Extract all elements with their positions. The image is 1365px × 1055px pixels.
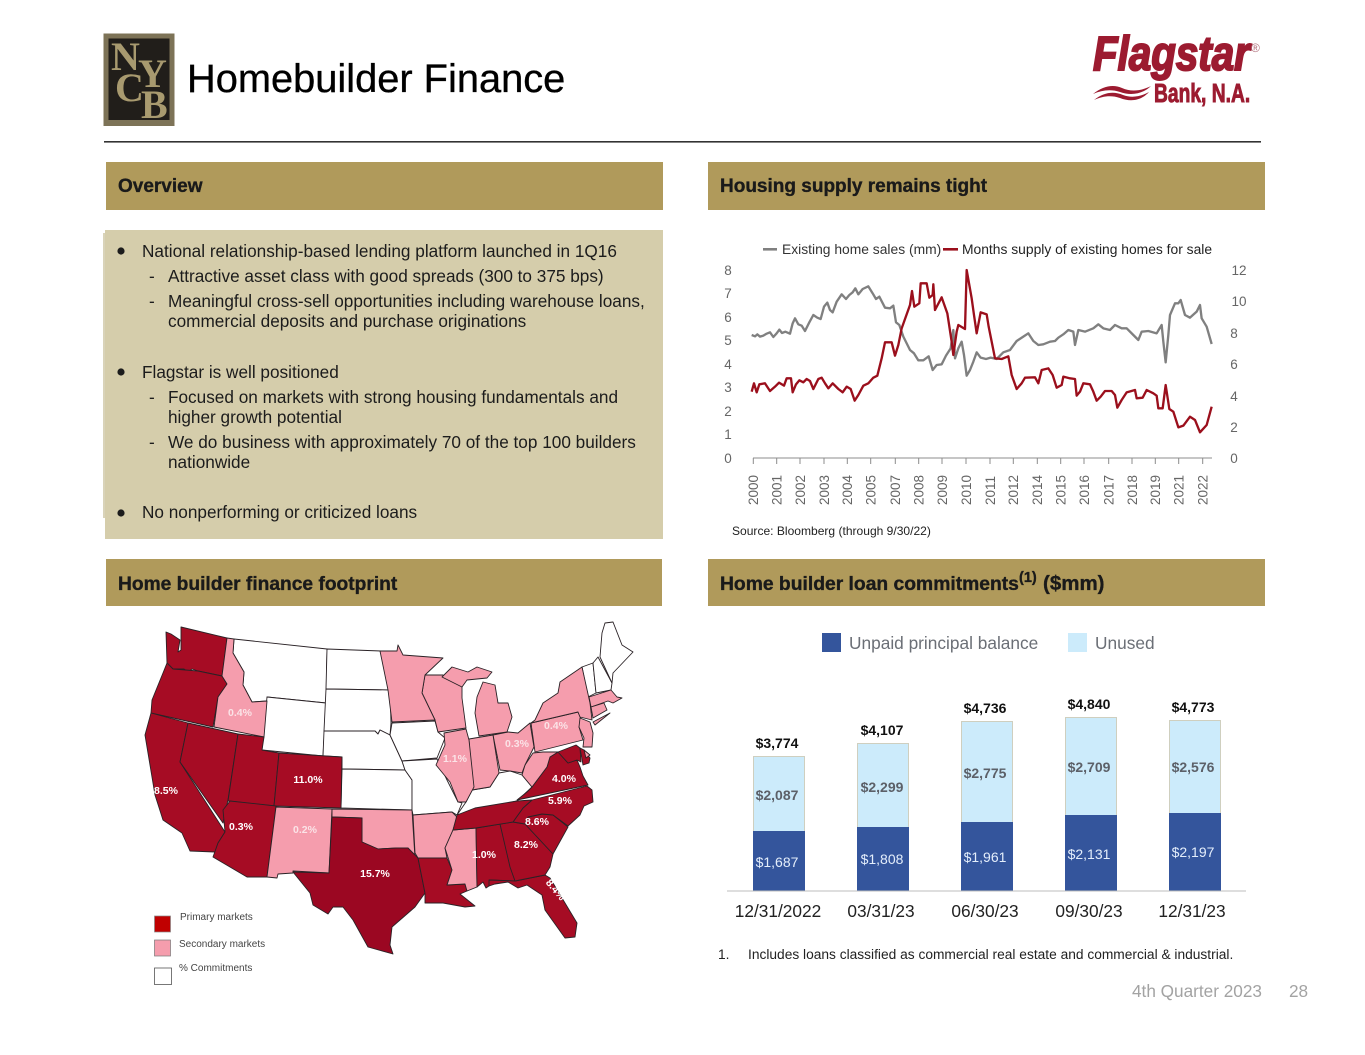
x axis year labels: 2019 bbox=[1148, 475, 1163, 505]
bar: 09/30/23: $2,131 bbox=[1068, 846, 1111, 862]
bar: 12/31/2022: $1,687 bbox=[756, 854, 799, 870]
x axis year labels: 2011 bbox=[983, 476, 998, 505]
left axis labels: 4 bbox=[724, 357, 732, 372]
bar: 06/30/23: $1,961 bbox=[964, 849, 1007, 865]
panel: overview text bbox=[103, 230, 663, 539]
x axis year labels: 2000 bbox=[746, 475, 761, 505]
map value labels: 8.4% bbox=[543, 877, 568, 904]
left axis labels: 5 bbox=[724, 333, 732, 348]
panel: overview text: Meaningful cross-sell opportunities including warehouse loans, bbox=[168, 291, 645, 311]
x axis year labels: 2015 bbox=[1054, 475, 1068, 505]
x axis year labels: 2002 bbox=[793, 475, 808, 505]
bar: 12/31/23: 12/31/23 bbox=[1158, 901, 1226, 921]
map value labels: 0.3% bbox=[229, 821, 254, 833]
panel: overview text: commercial deposits and purchase originations bbox=[168, 311, 526, 331]
series: existing home sales bbox=[752, 286, 1212, 376]
right axis labels: 10 bbox=[1231, 294, 1247, 309]
panel: overview text: - bbox=[149, 432, 155, 452]
x axis year labels: 2010 bbox=[959, 475, 974, 505]
left axis labels: 0 bbox=[724, 451, 732, 466]
line chart: housing supply bbox=[724, 241, 1247, 505]
x axis year labels: 2007 bbox=[888, 475, 903, 505]
map value labels: 11.0% bbox=[293, 774, 323, 786]
map value labels: 0.3% bbox=[505, 738, 530, 750]
heading: Housing supply remains tight bbox=[708, 162, 1265, 210]
right axis labels: 4 bbox=[1230, 389, 1238, 404]
map legend: Primary markets bbox=[180, 912, 253, 923]
logo: NYCB bbox=[104, 34, 174, 127]
map value labels: 8.6% bbox=[525, 816, 550, 828]
bar: 12/31/2022: 12/31/2022 bbox=[735, 901, 821, 921]
bar: 03/31/23: $1,808 bbox=[861, 851, 904, 867]
chart legend bbox=[763, 241, 1212, 257]
panel: overview text: higher growth potential bbox=[168, 407, 342, 427]
map value labels: 5.9% bbox=[548, 795, 573, 807]
left axis labels bbox=[724, 263, 732, 466]
right axis labels: 8 bbox=[1230, 326, 1238, 341]
bar: 06/30/23: 06/30/23 bbox=[951, 901, 1019, 921]
panel: overview text: - bbox=[149, 266, 155, 286]
bar: 03/31/23: $2,299 bbox=[861, 779, 904, 795]
bar: 12/31/2022: $2,087 bbox=[756, 787, 799, 803]
bar: 03/31/23 bbox=[847, 722, 915, 921]
bar: 09/30/23 bbox=[1055, 696, 1123, 921]
logo: Flagstar Bank: Bank, N.A. bbox=[1154, 78, 1250, 108]
map legend: Secondary markets bbox=[179, 939, 265, 950]
map: US footprint bbox=[145, 622, 633, 954]
bar: 12/31/23: $2,197 bbox=[1172, 844, 1215, 860]
right axis labels: 6 bbox=[1230, 357, 1238, 372]
panel: overview text: - bbox=[149, 291, 155, 311]
heading: Home builder finance footprint bbox=[106, 559, 662, 606]
bar chart legend: Unused bbox=[1095, 633, 1155, 653]
right axis labels: 12 bbox=[1231, 263, 1247, 278]
panel: overview text: We do business with approximately 70 of the top 100 builders bbox=[168, 432, 636, 452]
panel: overview text: Attractive asset class with good spreads (300 to 375 bps) bbox=[168, 266, 604, 286]
x axis year labels: 2008 bbox=[912, 475, 926, 505]
heading: Home builder loan commitments: ($mm) bbox=[1043, 572, 1105, 595]
heading: Home builder finance footprint: Home builder finance footprint bbox=[118, 574, 398, 595]
x axis year labels bbox=[746, 474, 1210, 505]
bar: 03/31/23: 03/31/23 bbox=[847, 901, 915, 921]
x axis year labels: 2018 bbox=[1125, 475, 1140, 505]
right axis labels bbox=[1230, 263, 1247, 466]
panel: overview text: No nonperforming or criticized loans bbox=[142, 502, 417, 522]
bar: 12/31/2022: $3,774 bbox=[756, 735, 799, 751]
heading: Home builder loan commitments: Home builder loan commitments bbox=[720, 574, 1019, 595]
heading: Home builder loan commitments bbox=[708, 559, 1265, 606]
map value labels: 15.7% bbox=[360, 868, 391, 880]
source note: Source: Bloomberg (through 9/30/22) bbox=[732, 524, 931, 538]
x axis year labels: 2005 bbox=[864, 475, 878, 505]
panel: overview text: Flagstar is well positioned bbox=[142, 362, 339, 382]
bar chart legend: Unpaid principal balance bbox=[849, 633, 1038, 653]
bar: 09/30/23: $4,840 bbox=[1068, 696, 1111, 712]
heading: Overview bbox=[106, 162, 663, 210]
right axis labels: 2 bbox=[1230, 420, 1238, 435]
heading: Overview: Overview bbox=[118, 176, 203, 197]
x axis year labels: 2004 bbox=[840, 474, 855, 505]
logo: NYCB: B bbox=[141, 82, 168, 127]
map legend: % Commitments bbox=[179, 963, 252, 974]
bar: 12/31/23 bbox=[1158, 699, 1226, 921]
logo: NYCB: Y bbox=[138, 51, 167, 96]
footer: quarter and page number: 4th Quarter 2023 bbox=[1132, 981, 1262, 1001]
series: months supply bbox=[752, 270, 1212, 432]
x axis year labels: 2014 bbox=[1030, 474, 1045, 505]
panel: overview text: Focused on markets with strong housing fundamentals and bbox=[168, 387, 618, 407]
bar: 06/30/23: $4,736 bbox=[964, 700, 1007, 716]
chart legend: Existing home sales (mm) bbox=[782, 241, 941, 257]
header rule bbox=[104, 141, 1261, 143]
left axis labels: 7 bbox=[724, 286, 732, 301]
x axis year labels: 2022 bbox=[1196, 475, 1210, 505]
map value labels bbox=[154, 707, 577, 904]
bar: 12/31/23: $2,576 bbox=[1172, 759, 1215, 775]
panel: overview text: National relationship-based lending platform launched in 1Q16 bbox=[142, 241, 617, 261]
bar: 03/31/23: $4,107 bbox=[861, 722, 904, 738]
bar chart legend bbox=[822, 633, 1155, 653]
logo: NYCB: C bbox=[115, 65, 144, 110]
panel: overview text: nationwide bbox=[168, 452, 250, 472]
map value labels: 8.2% bbox=[514, 839, 539, 851]
map value labels: 8.5% bbox=[154, 785, 179, 797]
map legend bbox=[154, 912, 265, 984]
bar: 12/31/23: $4,773 bbox=[1172, 699, 1215, 715]
x axis year labels: 2016 bbox=[1077, 475, 1092, 505]
bar: 09/30/23: $2,709 bbox=[1068, 759, 1111, 775]
x axis bbox=[753, 458, 1212, 464]
chart legend: Months supply of existing homes for sale bbox=[962, 241, 1212, 257]
x axis year labels: 2017 bbox=[1102, 475, 1116, 505]
logo: Flagstar Bank: ® bbox=[1251, 41, 1260, 55]
map value labels: 1.1% bbox=[443, 753, 468, 765]
left axis labels: 6 bbox=[724, 310, 732, 325]
x axis year labels: 2003 bbox=[817, 475, 832, 505]
left axis labels: 8 bbox=[724, 263, 732, 278]
bar: 09/30/23: 09/30/23 bbox=[1055, 901, 1123, 921]
panel: overview text: - bbox=[149, 387, 155, 407]
title: Homebuilder Finance bbox=[187, 57, 565, 101]
footnote: 1. bbox=[718, 947, 729, 962]
map value labels: 1.0% bbox=[472, 849, 497, 861]
logo: Flagstar Bank bbox=[1093, 28, 1260, 108]
x axis year labels: 2009 bbox=[935, 475, 950, 505]
bar: 12/31/2022 bbox=[735, 735, 821, 921]
bar: 06/30/23 bbox=[951, 700, 1019, 921]
map value labels: 4.0% bbox=[552, 773, 577, 785]
bar chart: loan commitments bbox=[727, 696, 1246, 921]
left axis labels: 1 bbox=[724, 427, 732, 442]
logo: NYCB: N bbox=[111, 34, 140, 79]
right axis labels: 0 bbox=[1230, 451, 1238, 466]
heading: Housing supply remains tight: Housing supply remains tight bbox=[720, 176, 988, 197]
logo: Flagstar Bank: Flagstar bbox=[1093, 28, 1252, 81]
x axis year labels: 2001 bbox=[770, 475, 784, 505]
heading: Home builder loan commitments: (1) bbox=[1019, 570, 1037, 586]
bar: 06/30/23: $2,775 bbox=[964, 765, 1007, 781]
footer: quarter and page number: 28 bbox=[1289, 981, 1308, 1001]
x axis year labels: 2021 bbox=[1172, 475, 1186, 505]
footnote: Includes loans classified as commercial real estate and commercial & industrial. bbox=[748, 947, 1233, 962]
map value labels: 0.4% bbox=[228, 707, 253, 719]
x axis year labels: 2012 bbox=[1006, 475, 1021, 505]
left axis labels: 3 bbox=[724, 380, 732, 395]
left axis labels: 2 bbox=[724, 404, 732, 419]
map value labels: 0.4% bbox=[544, 720, 569, 732]
map value labels: 0.2% bbox=[293, 824, 318, 836]
